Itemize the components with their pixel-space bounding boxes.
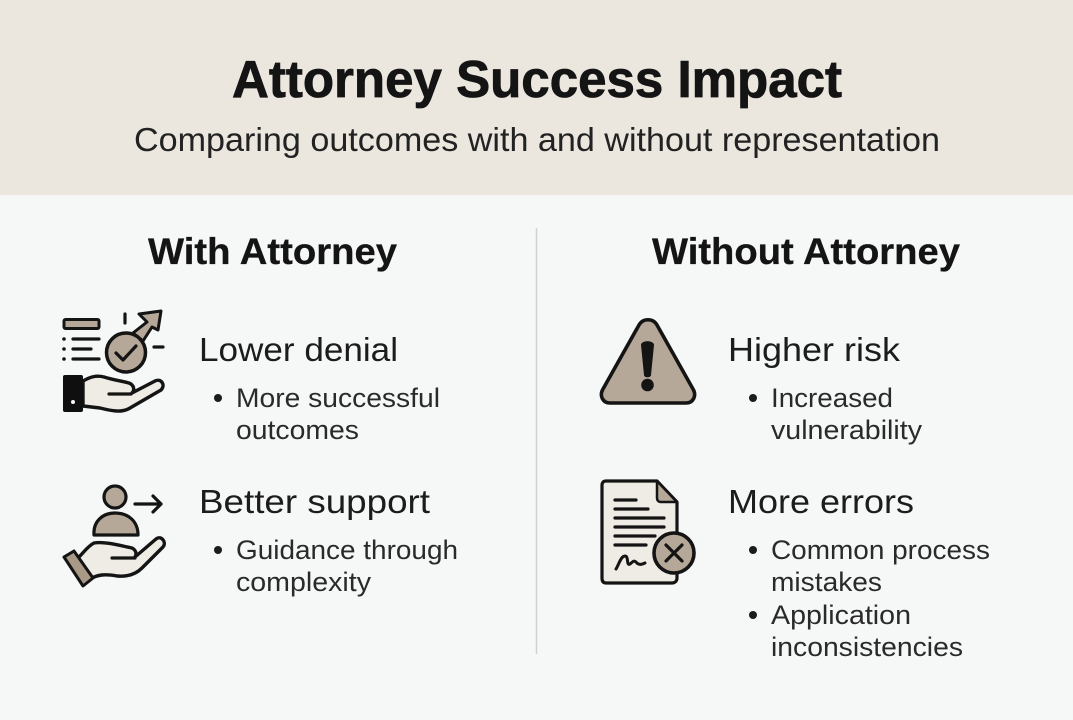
text: higher risk: Higher risk xyxy=(728,331,901,368)
text: better support: complexity xyxy=(236,567,372,597)
icon: warning triangle xyxy=(601,320,695,403)
text: higher risk: vulnerability xyxy=(771,415,923,445)
text: higher risk xyxy=(728,331,923,445)
text: higher risk: Increased xyxy=(771,383,893,413)
header band xyxy=(0,0,1073,195)
text: better support xyxy=(199,483,458,597)
panel: without attorney xyxy=(601,231,990,662)
text: lower denial: More successful xyxy=(236,383,440,413)
text: lower denial xyxy=(199,331,440,445)
icon: document with error mark xyxy=(602,481,694,583)
icon: checklist, target arrow and hand xyxy=(62,311,163,412)
text: more errors xyxy=(728,483,990,662)
heading: without attorney: Without Attorney xyxy=(652,231,960,272)
text: more errors: Common process xyxy=(771,535,990,565)
text: better support: Better support xyxy=(199,483,430,520)
icon: person with arrow over hand xyxy=(64,486,164,586)
panel: with attorney xyxy=(62,231,458,597)
text: lower denial: outcomes xyxy=(236,415,359,445)
text: lower denial: Lower denial xyxy=(199,331,398,368)
title: Attorney Success Impact xyxy=(232,51,842,109)
text: more errors: More errors xyxy=(728,483,914,520)
subtitle: Comparing outcomes with and without representation xyxy=(134,121,940,158)
text: more errors: Application xyxy=(771,600,911,630)
text: more errors: mistakes xyxy=(771,567,882,597)
heading: with attorney: With Attorney xyxy=(148,231,397,272)
text: better support: Guidance through xyxy=(236,535,458,565)
text: more errors: inconsistencies xyxy=(771,632,963,662)
